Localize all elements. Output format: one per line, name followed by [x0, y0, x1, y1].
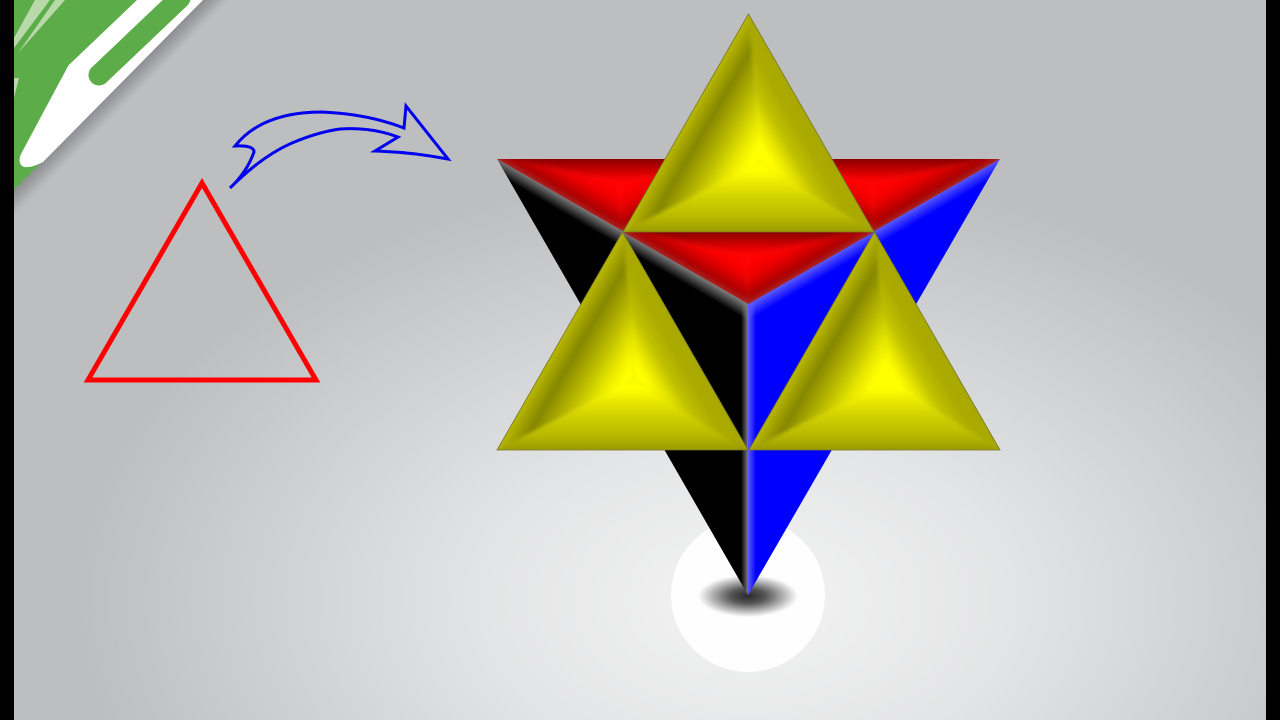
- corner logo ribbon: [14, 0, 228, 216]
- white pen shape: [20, 0, 203, 167]
- ribbon shadow: [14, 0, 228, 216]
- red triangle outline: [88, 183, 316, 380]
- white glow circle: [671, 518, 825, 672]
- ribbon green field: [14, 0, 203, 190]
- light streaks: [14, 0, 65, 98]
- yellow left triangle: [469, 202, 770, 464]
- star tetrahedron: [469, 0, 1025, 595]
- curved blue arrow: [230, 106, 448, 188]
- yellow right triangle: [721, 202, 1022, 464]
- yellow top triangle: [595, 0, 896, 246]
- red left facet: [472, 149, 773, 249]
- contact shadow: [698, 575, 798, 617]
- blue facet: [748, 159, 1000, 595]
- black facet: [497, 159, 748, 595]
- red centre facet: [598, 222, 899, 322]
- pen green slot: [99, 0, 180, 75]
- red right facet: [724, 149, 1025, 249]
